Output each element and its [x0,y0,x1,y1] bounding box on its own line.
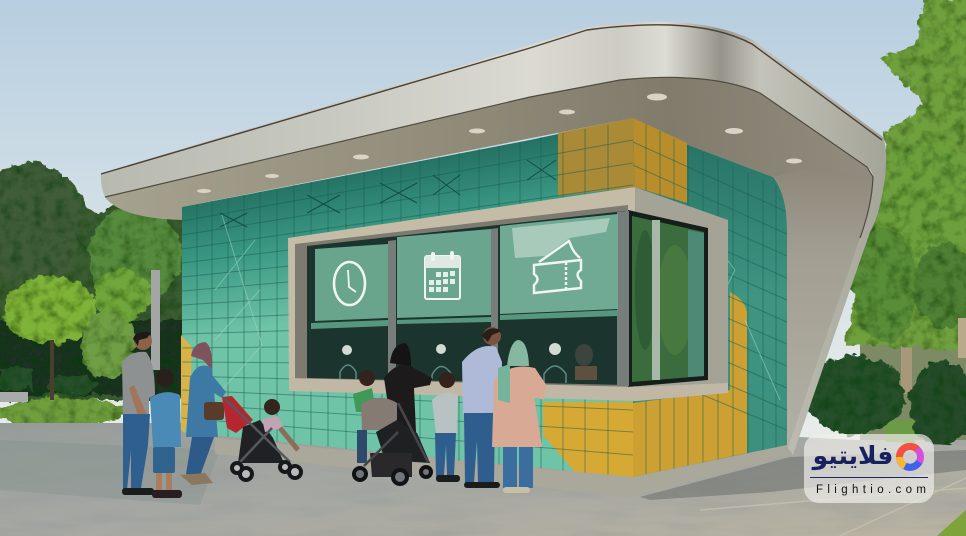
woman in pink coat and green scarf [492,340,547,493]
counter sill [289,378,728,401]
child in white tee [432,372,460,482]
woman in denim dress [180,342,226,485]
logo wordmark: latin: Flightio.com [816,484,926,496]
boy in blue [150,369,182,498]
man in grey shirt [122,332,155,495]
ground: marble plaza [0,423,966,536]
soffit lights [197,94,802,193]
yellow tile patches [181,118,747,477]
frosted pane with clock icon [311,244,388,329]
logo mark: colour ring [899,446,920,468]
window surround [288,187,728,400]
trees: left background [0,163,190,426]
wall: left tiled face [182,118,633,477]
tile lattice pattern [215,160,780,400]
logo divider [810,477,928,478]
man in lavender shirt [462,327,502,488]
frosted pane with ticket icon [500,214,618,320]
frosted pane with calendar icon [397,229,491,324]
icon: clock [334,262,365,305]
tile grid [182,124,787,476]
lamp post [151,270,160,370]
logo wordmark: Arabic: فلایتیو [811,441,893,471]
roof metal band [101,22,886,455]
side glazing [628,210,708,387]
front glazing dark [307,211,625,385]
child in green [353,370,376,463]
stroller with toddler [222,396,301,480]
mullions [388,211,629,386]
concrete column [773,170,873,450]
icon: ticket [534,241,581,293]
woman in black [384,343,432,432]
soffit [105,77,873,400]
service hatches [340,343,597,383]
stroller two [354,398,431,484]
plinth [215,438,787,497]
inner reveal [295,205,628,388]
wall: right tiled face [633,118,787,477]
kiosk building [101,22,886,497]
trees: right background [805,0,966,446]
icon: calendar [425,251,460,299]
people queue [122,327,547,498]
logo badge [804,434,934,503]
